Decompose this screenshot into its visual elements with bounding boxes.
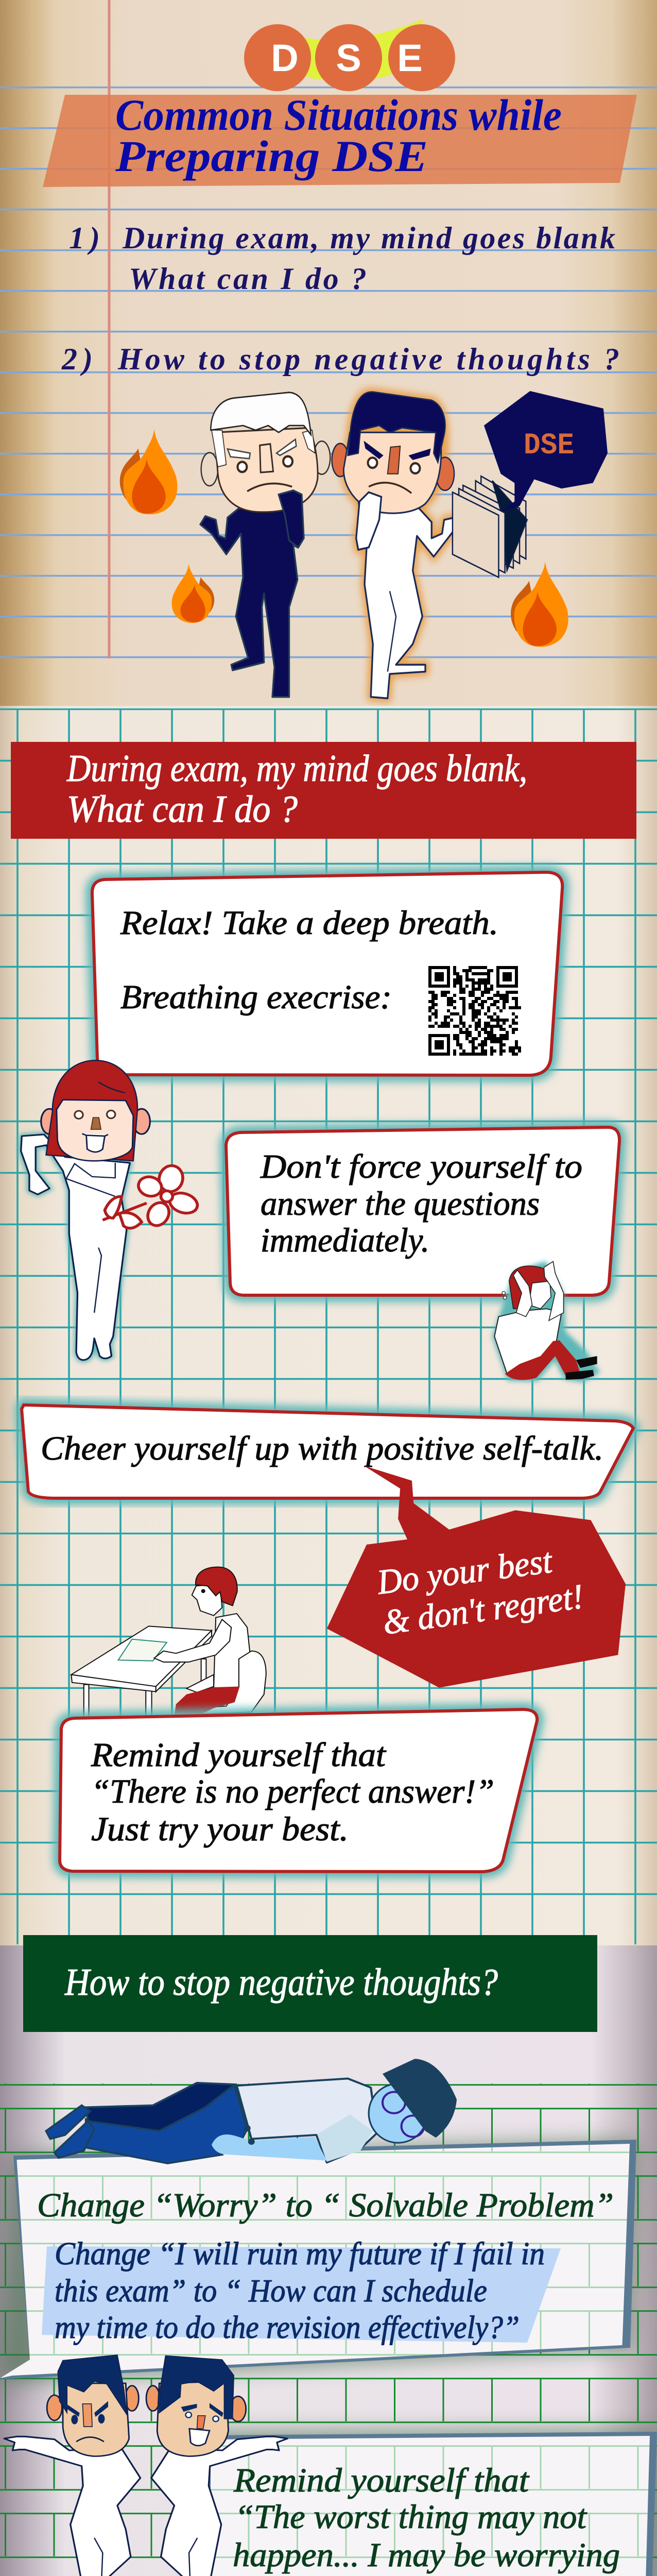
heading: how to stop negative thoughts: How to stop negative thoughts? [64, 1961, 498, 2004]
panel: do not force yourself [226, 1127, 619, 1295]
panel: the worst thing may not happen: “The worst thing may not [235, 2498, 587, 2536]
icon: flames [120, 429, 568, 647]
icon: document folders [453, 476, 527, 578]
handwritten question list: How to stop negative thoughts ? [117, 342, 619, 376]
title banner: Common Situations while [115, 90, 562, 140]
DSE badge circles: E [397, 37, 423, 79]
speech bubble: DSE: DSE [524, 429, 574, 463]
panel: do not force yourself: answer the questions [261, 1185, 540, 1223]
speech bubble: DSE [484, 391, 608, 512]
character: man lying on bubble [46, 2059, 457, 2163]
panel: positive self-talk: Cheer yourself up with positive self-talk. [41, 1430, 603, 1467]
heading: during exam: During exam, my mind goes blank, [66, 748, 527, 790]
DSE badge circles: S [336, 37, 361, 79]
speech bubble: do your best: Do your best [374, 1540, 555, 1602]
panel: relax and breathing exercise [92, 872, 562, 1075]
QR code: breathing exercise [428, 966, 521, 1056]
DSE badge circles: D [271, 37, 299, 79]
handwritten question list: During exam, my mind goes blank [122, 221, 615, 255]
panel: the worst thing may not happen: Remind yourself that [233, 2462, 530, 2499]
panel: the worst thing may not happen [185, 2429, 657, 2576]
left twin [4, 2355, 141, 2576]
title banner: Preparing DSE [115, 131, 428, 181]
character: stressed student crouching [494, 1261, 597, 1381]
handwritten question list: What can I do ? [129, 262, 367, 296]
character: smiling woman with flower [21, 1060, 200, 1360]
character: student at desk [71, 1567, 266, 1718]
handwritten question list: 1 ) [69, 221, 100, 255]
highlighted example text: Change “I will ruin my future if I fail in [55, 2236, 545, 2272]
speech bubble: do your best [327, 1466, 626, 1688]
section 2: teal graph-paper background [0, 706, 657, 1945]
section 3: green grid background [0, 1945, 657, 2576]
heading: during exam [11, 742, 636, 839]
character: twin men pointing outward [4, 2355, 287, 2576]
panel: no perfect answer: “There is no perfect answer!” [91, 1773, 494, 1810]
heading: how to stop negative thoughts [23, 1935, 597, 2032]
handwritten question list [61, 221, 619, 376]
character: dark-haired man in white [332, 392, 457, 698]
highlighted example text [42, 2236, 561, 2345]
highlighted example text: my time to do the revision effectively?” [55, 2310, 520, 2345]
panel: no perfect answer: Remind yourself that [91, 1736, 387, 1774]
panel: relax and breathing exercise: Breathing execrise: [120, 978, 392, 1016]
heading: during exam: What can I do ? [67, 788, 298, 831]
right twin [146, 2355, 287, 2576]
handwritten question list: 2 ) [61, 342, 93, 376]
panel: change worry to solvable problem: Change “Worry” to “ Solvable Problem” [37, 2187, 614, 2224]
highlighted example text: this exam” to “ How can I schedule [55, 2274, 487, 2309]
panel: relax and breathing exercise: Relax! Take a deep breath. [120, 904, 498, 942]
panel: do not force yourself: Don't force yourself to [260, 1148, 582, 1185]
panel: do not force yourself: immediately. [261, 1222, 429, 1259]
DSE badge circles [244, 20, 455, 91]
panel: no perfect answer [60, 1709, 537, 1872]
speech bubble: do your best: & don't regret! [381, 1577, 586, 1642]
character: grey-haired man in navy [200, 393, 330, 697]
title banner [43, 90, 637, 187]
panel: positive self-talk [22, 1405, 633, 1498]
panel: no perfect answer: Just try your best. [91, 1810, 349, 1848]
panel: the worst thing may not happen: happen... I may be worrying [233, 2536, 620, 2574]
icon: flower [102, 1164, 200, 1229]
section 1: lined notebook background [0, 0, 657, 707]
panel: change worry to solvable problem [0, 2138, 657, 2385]
